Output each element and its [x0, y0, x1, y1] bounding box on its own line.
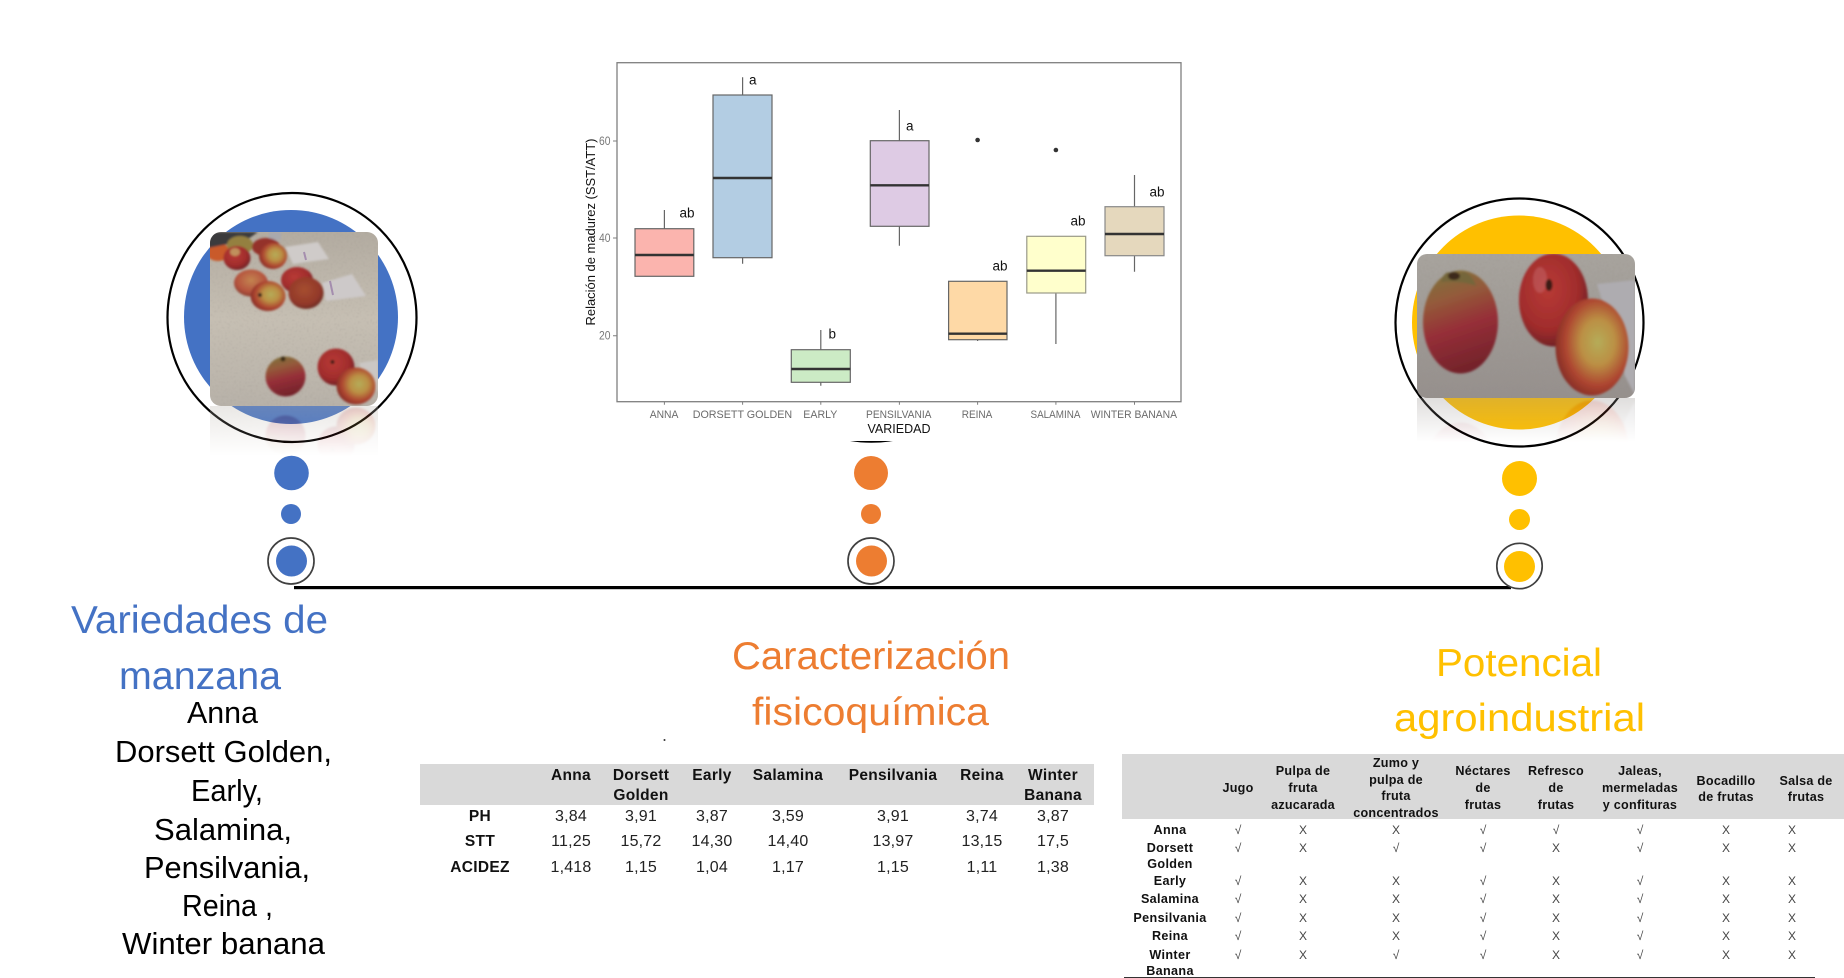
significance letters: ab	[679, 206, 695, 221]
row: PH: 3,87	[1037, 808, 1069, 825]
row: STT: 14,30	[691, 833, 733, 850]
row labels: Salamina	[1141, 892, 1200, 906]
x axis: WINTER BANANA	[1091, 409, 1178, 421]
row marks: Winter Banana: √	[1393, 948, 1400, 962]
row: ACIDEZ: 1,418	[550, 859, 592, 876]
icon: yellow circle with apple photo	[1394, 197, 1645, 448]
row: ACIDEZ: 1,15	[625, 859, 657, 876]
row marks: Pensilvania: √	[1235, 911, 1242, 925]
significance letters: ab	[1149, 184, 1165, 199]
row marks: Pensilvania: √	[1637, 911, 1644, 925]
heading: Potencial agroindustrial: agroindustrial	[1394, 697, 1645, 740]
x axis: EARLY	[803, 409, 838, 421]
row marks: Dorsett Golden: √	[1480, 841, 1487, 855]
timeline dots: orange	[848, 456, 894, 584]
row marks: Reina: X	[1722, 929, 1730, 943]
heading: Variedades de manzana: Variedades de	[71, 599, 328, 642]
row marks: Reina	[1235, 929, 1796, 943]
table header	[1222, 756, 1833, 820]
significance letters: ab	[992, 259, 1008, 274]
row marks: Anna: √	[1553, 823, 1560, 837]
table header: de	[1475, 781, 1491, 795]
x axis: DORSETT GOLDEN	[693, 409, 792, 421]
row marks: Reina: √	[1480, 929, 1487, 943]
row marks: Anna	[1235, 823, 1796, 837]
icon: blue circle with apple photo	[166, 192, 418, 450]
row marks: Pensilvania: √	[1480, 911, 1487, 925]
row labels: Early	[1154, 874, 1186, 888]
text block: variety list: Dorsett Golden,	[115, 734, 332, 769]
box: Early	[791, 330, 850, 386]
significance letters	[679, 72, 1165, 342]
significance letters: a	[906, 118, 914, 133]
y axis: 60	[599, 136, 610, 148]
heading: Caracterización fisicoquímica: fisicoquímica	[752, 691, 989, 734]
row marks: Dorsett Golden: √	[1393, 841, 1400, 855]
row marks: Early: √	[1637, 874, 1644, 888]
x axis	[650, 402, 1178, 436]
table header	[551, 767, 1082, 804]
row marks: Early	[1235, 874, 1796, 888]
row marks: Dorsett Golden: X	[1552, 841, 1560, 855]
timeline dots: blue	[268, 456, 314, 584]
table header: fruta	[1381, 789, 1411, 803]
row marks: Reina: X	[1392, 929, 1400, 943]
table header: Salsa de	[1779, 774, 1833, 788]
box: Dorsett Golden	[713, 77, 772, 264]
row marks: Reina: X	[1788, 929, 1796, 943]
heading: Caracterización fisicoquímica: Caracterización	[732, 635, 1010, 678]
table header: Pensilvania	[849, 767, 937, 784]
row marks: Anna: √	[1637, 823, 1644, 837]
boxplot chart	[584, 63, 1181, 436]
row marks: Pensilvania: X	[1392, 911, 1400, 925]
row labels	[1133, 823, 1207, 978]
text block: variety list: Anna	[187, 695, 259, 730]
row marks: Dorsett Golden: X	[1722, 841, 1730, 855]
heading: Variedades de manzana: manzana	[119, 655, 281, 698]
table header: de	[1548, 781, 1564, 795]
row: STT: 15,72	[620, 833, 662, 850]
row marks: Pensilvania: X	[1299, 911, 1307, 925]
row: PH: 3,59	[772, 808, 804, 825]
table header: Jaleas,	[1618, 764, 1662, 778]
row marks: Salamina: X	[1392, 892, 1400, 906]
text block: variety list: Winter banana	[122, 926, 326, 961]
row labels: Anna	[1154, 823, 1187, 837]
row: ACIDEZ: 1,11	[967, 859, 997, 876]
row marks: Winter Banana: √	[1480, 948, 1487, 962]
table header: Jugo	[1222, 781, 1254, 795]
row: ACIDEZ: 1,04	[696, 859, 728, 876]
row marks: Salamina: X	[1722, 892, 1730, 906]
row marks: Pensilvania	[1235, 911, 1796, 925]
table header: frutas	[1465, 798, 1501, 812]
row marks: Reina: √	[1637, 929, 1644, 943]
row marks: Dorsett Golden	[1235, 841, 1796, 855]
table header: Néctares	[1455, 764, 1511, 778]
table header: Golden	[613, 787, 669, 804]
row: PH: 3,87	[696, 808, 728, 825]
x axis: REINA	[962, 409, 993, 421]
row marks: Winter Banana: √	[1235, 948, 1242, 962]
row marks: Early: X	[1392, 874, 1400, 888]
box: Reina	[949, 138, 1007, 341]
heading: Caracterización fisicoquímica	[732, 635, 1010, 734]
row: STT: 17,5	[1037, 833, 1069, 850]
row marks: Salamina: X	[1788, 892, 1796, 906]
row marks: Dorsett Golden: X	[1299, 841, 1307, 855]
y axis: Relación de madurez (SST/ATT)	[584, 138, 598, 326]
row: ACIDEZ: ACIDEZ	[450, 859, 510, 876]
row marks: Salamina: X	[1299, 892, 1307, 906]
row marks: Early: X	[1299, 874, 1307, 888]
row marks: Salamina	[1235, 892, 1796, 906]
row marks: Anna: √	[1480, 823, 1487, 837]
row marks: Reina: √	[1235, 929, 1242, 943]
y axis: 40	[599, 233, 610, 245]
row: PH: 3,74	[966, 808, 998, 825]
row marks: Winter Banana: X	[1722, 948, 1730, 962]
table header: Zumo y	[1373, 756, 1419, 770]
table header: frutas	[1538, 798, 1574, 812]
row labels: Golden	[1147, 857, 1193, 871]
row marks: Dorsett Golden: √	[1235, 841, 1242, 855]
significance letters: a	[749, 72, 757, 87]
row: STT: 13,15	[961, 833, 1003, 850]
row: PH	[469, 808, 1069, 825]
table header: Reina	[960, 767, 1004, 784]
text block: variety list: Salamina,	[154, 812, 292, 847]
row: STT: 11,25	[551, 833, 591, 850]
row marks: Anna: X	[1299, 823, 1307, 837]
table header: pulpa de	[1369, 773, 1423, 787]
row marks: Early: √	[1235, 874, 1242, 888]
row marks: Anna: X	[1392, 823, 1400, 837]
table: agroindustrial potential	[1122, 754, 1844, 978]
timeline line	[294, 586, 1511, 589]
x axis: ANNA	[650, 409, 679, 421]
row marks: Early: √	[1480, 874, 1487, 888]
row: PH: 3,91	[877, 808, 909, 825]
row: PH: PH	[469, 808, 491, 825]
row marks: Early: X	[1722, 874, 1730, 888]
table header: Refresco	[1528, 764, 1584, 778]
table header: Salamina	[753, 767, 823, 784]
row: STT: STT	[465, 833, 495, 850]
row marks: Winter Banana: √	[1637, 948, 1644, 962]
row marks: Reina: X	[1299, 929, 1307, 943]
row: ACIDEZ: 1,15	[877, 859, 909, 876]
row marks: Salamina: √	[1235, 892, 1242, 906]
row marks: Dorsett Golden: √	[1637, 841, 1644, 855]
row: STT	[465, 833, 1069, 850]
row marks: Pensilvania: X	[1788, 911, 1796, 925]
row marks: Dorsett Golden: X	[1788, 841, 1796, 855]
row labels: Banana	[1146, 964, 1194, 978]
row marks: Winter Banana: X	[1552, 948, 1560, 962]
text block: variety list: Pensilvania,	[144, 850, 310, 885]
row: PH: 3,91	[625, 808, 657, 825]
table header: Pulpa de	[1276, 764, 1330, 778]
row marks: Winter Banana: X	[1299, 948, 1307, 962]
row marks: Anna: √	[1235, 823, 1242, 837]
row: ACIDEZ: 1,17	[772, 859, 804, 876]
row marks: Reina: X	[1552, 929, 1560, 943]
row marks: Salamina: √	[1480, 892, 1487, 906]
table header: Bocadillo	[1697, 774, 1756, 788]
row: STT: 13,97	[872, 833, 914, 850]
row marks: Pensilvania: X	[1722, 911, 1730, 925]
box: Anna	[635, 210, 694, 276]
row: ACIDEZ	[450, 859, 1069, 876]
table header: mermeladas	[1602, 781, 1678, 795]
x axis: PENSILVANIA	[866, 409, 932, 421]
table header: Anna	[551, 767, 591, 784]
table header: concentrados	[1353, 806, 1439, 820]
row marks: Salamina: X	[1552, 892, 1560, 906]
timeline dots: yellow	[1497, 461, 1542, 589]
significance letters: b	[829, 327, 836, 342]
row labels: Pensilvania	[1133, 911, 1207, 925]
row labels: Dorsett	[1147, 841, 1194, 855]
x axis: VARIEDAD	[868, 421, 930, 436]
table header: Winter	[1028, 767, 1078, 784]
text block: variety list	[115, 695, 332, 961]
row labels: Reina	[1152, 929, 1189, 943]
row marks: Salamina: √	[1637, 892, 1644, 906]
box: Pensilvania	[870, 110, 929, 246]
box: Salamina	[1027, 148, 1086, 344]
table header: fruta	[1288, 781, 1318, 795]
row marks: Early: X	[1788, 874, 1796, 888]
text block: variety list: Early,	[191, 773, 263, 808]
row: PH: 3,84	[555, 808, 587, 825]
table header: de frutas	[1698, 790, 1754, 804]
heading: Variedades de manzana	[71, 599, 328, 698]
table header: frutas	[1788, 790, 1824, 804]
table header: Early	[692, 767, 732, 784]
y axis: 20	[599, 331, 610, 343]
heading: Potencial agroindustrial	[1394, 642, 1645, 740]
y axis	[584, 136, 617, 343]
heading: Potencial agroindustrial: Potencial	[1436, 642, 1602, 685]
text block: variety list: Reina ,	[182, 888, 273, 923]
table header: Banana	[1024, 787, 1082, 804]
row marks: Anna: X	[1722, 823, 1730, 837]
stray dot	[664, 739, 666, 741]
table header: Dorsett	[613, 767, 669, 784]
row marks: Pensilvania: X	[1552, 911, 1560, 925]
row marks: Early: X	[1552, 874, 1560, 888]
table header: y confituras	[1603, 798, 1677, 812]
table header: azucarada	[1271, 798, 1336, 812]
row marks: Winter Banana: X	[1788, 948, 1796, 962]
box: Winter Banana	[1105, 175, 1164, 272]
row marks: Winter Banana	[1235, 948, 1796, 962]
table: physicochemical characterization	[420, 764, 1094, 876]
x axis: SALAMINA	[1030, 409, 1081, 421]
row labels: Winter	[1149, 948, 1191, 962]
row: ACIDEZ: 1,38	[1037, 859, 1069, 876]
row: STT: 14,40	[767, 833, 809, 850]
small black arc	[850, 441, 893, 443]
row marks: Anna: X	[1788, 823, 1796, 837]
significance letters: ab	[1070, 214, 1086, 229]
